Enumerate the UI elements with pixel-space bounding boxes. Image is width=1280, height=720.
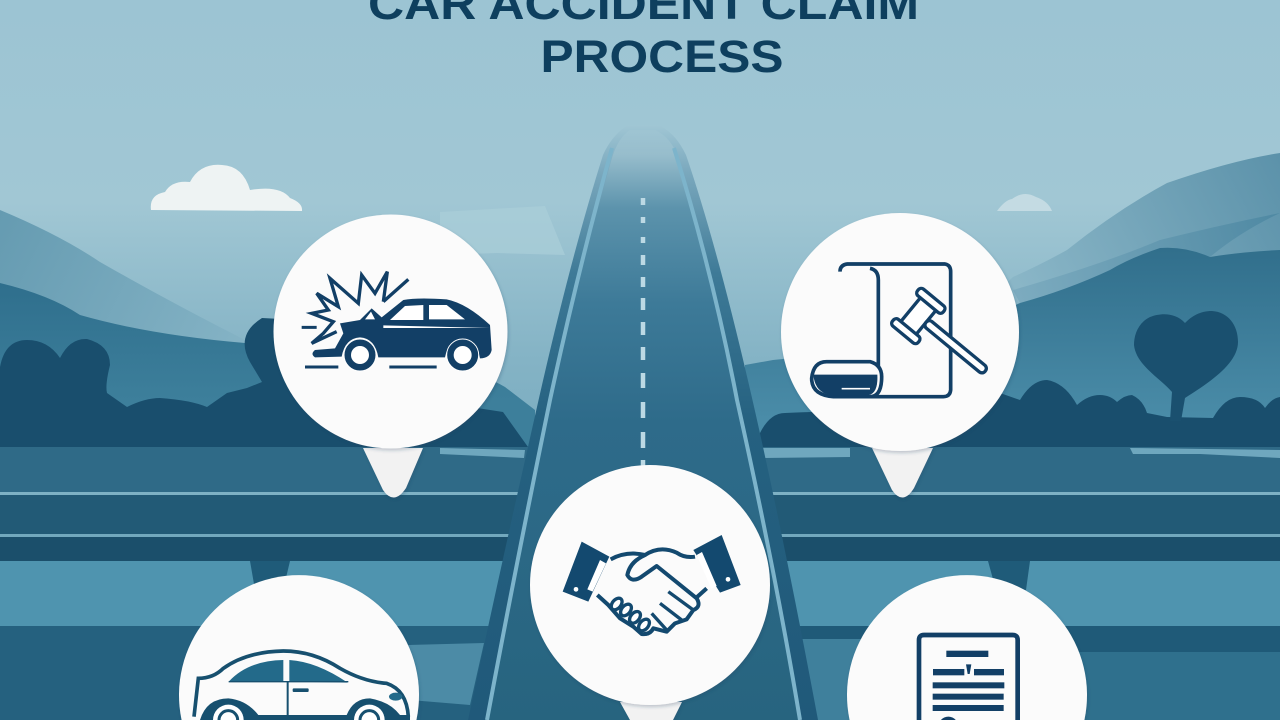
- icon: scroll and gavel: [812, 264, 1000, 397]
- icon: handshake: [563, 535, 741, 634]
- pin circle: [179, 575, 419, 720]
- road shoulder: [468, 125, 818, 720]
- cloud: right: [997, 194, 1052, 211]
- tree line: left: [0, 318, 528, 447]
- heart-shaped tree: [1134, 311, 1238, 421]
- road edge line: left: [487, 148, 612, 720]
- pin circle: [781, 213, 1019, 451]
- mountains: left light range: [0, 210, 300, 400]
- icon: crashed car: [302, 272, 492, 371]
- gavel: [890, 287, 1000, 390]
- title: [368, 0, 919, 82]
- pin circle: [274, 214, 508, 448]
- pin tail: [872, 448, 933, 498]
- mountains: right dark range: [745, 248, 1280, 450]
- mountains: right mid range: [1013, 213, 1280, 303]
- icon: sedan car: [194, 651, 410, 720]
- pin tail: [620, 702, 682, 720]
- pin: legal claim: [781, 213, 1019, 498]
- title: PROCESS: [540, 31, 784, 82]
- ground bands: left and right of road: [0, 447, 1280, 720]
- cloud: left: [151, 165, 302, 211]
- sky background: [0, 0, 1280, 450]
- icon: claim document: [919, 635, 1018, 720]
- faint distant haze: [440, 206, 565, 255]
- mountains: right light range: [940, 153, 1280, 345]
- pin: documents: [847, 575, 1087, 720]
- road edge line: right: [674, 148, 800, 720]
- pin tail: [363, 448, 423, 498]
- pin: accident: [274, 214, 508, 498]
- road centre dashes: [641, 198, 645, 466]
- pin circle: [847, 575, 1087, 720]
- pin: settlement: [530, 465, 770, 720]
- road surface: [487, 130, 800, 720]
- tree line: right: [760, 380, 1280, 447]
- pin: insurance car: [179, 575, 419, 720]
- mountains: left dark range: [0, 283, 535, 450]
- pin circle: [530, 465, 770, 705]
